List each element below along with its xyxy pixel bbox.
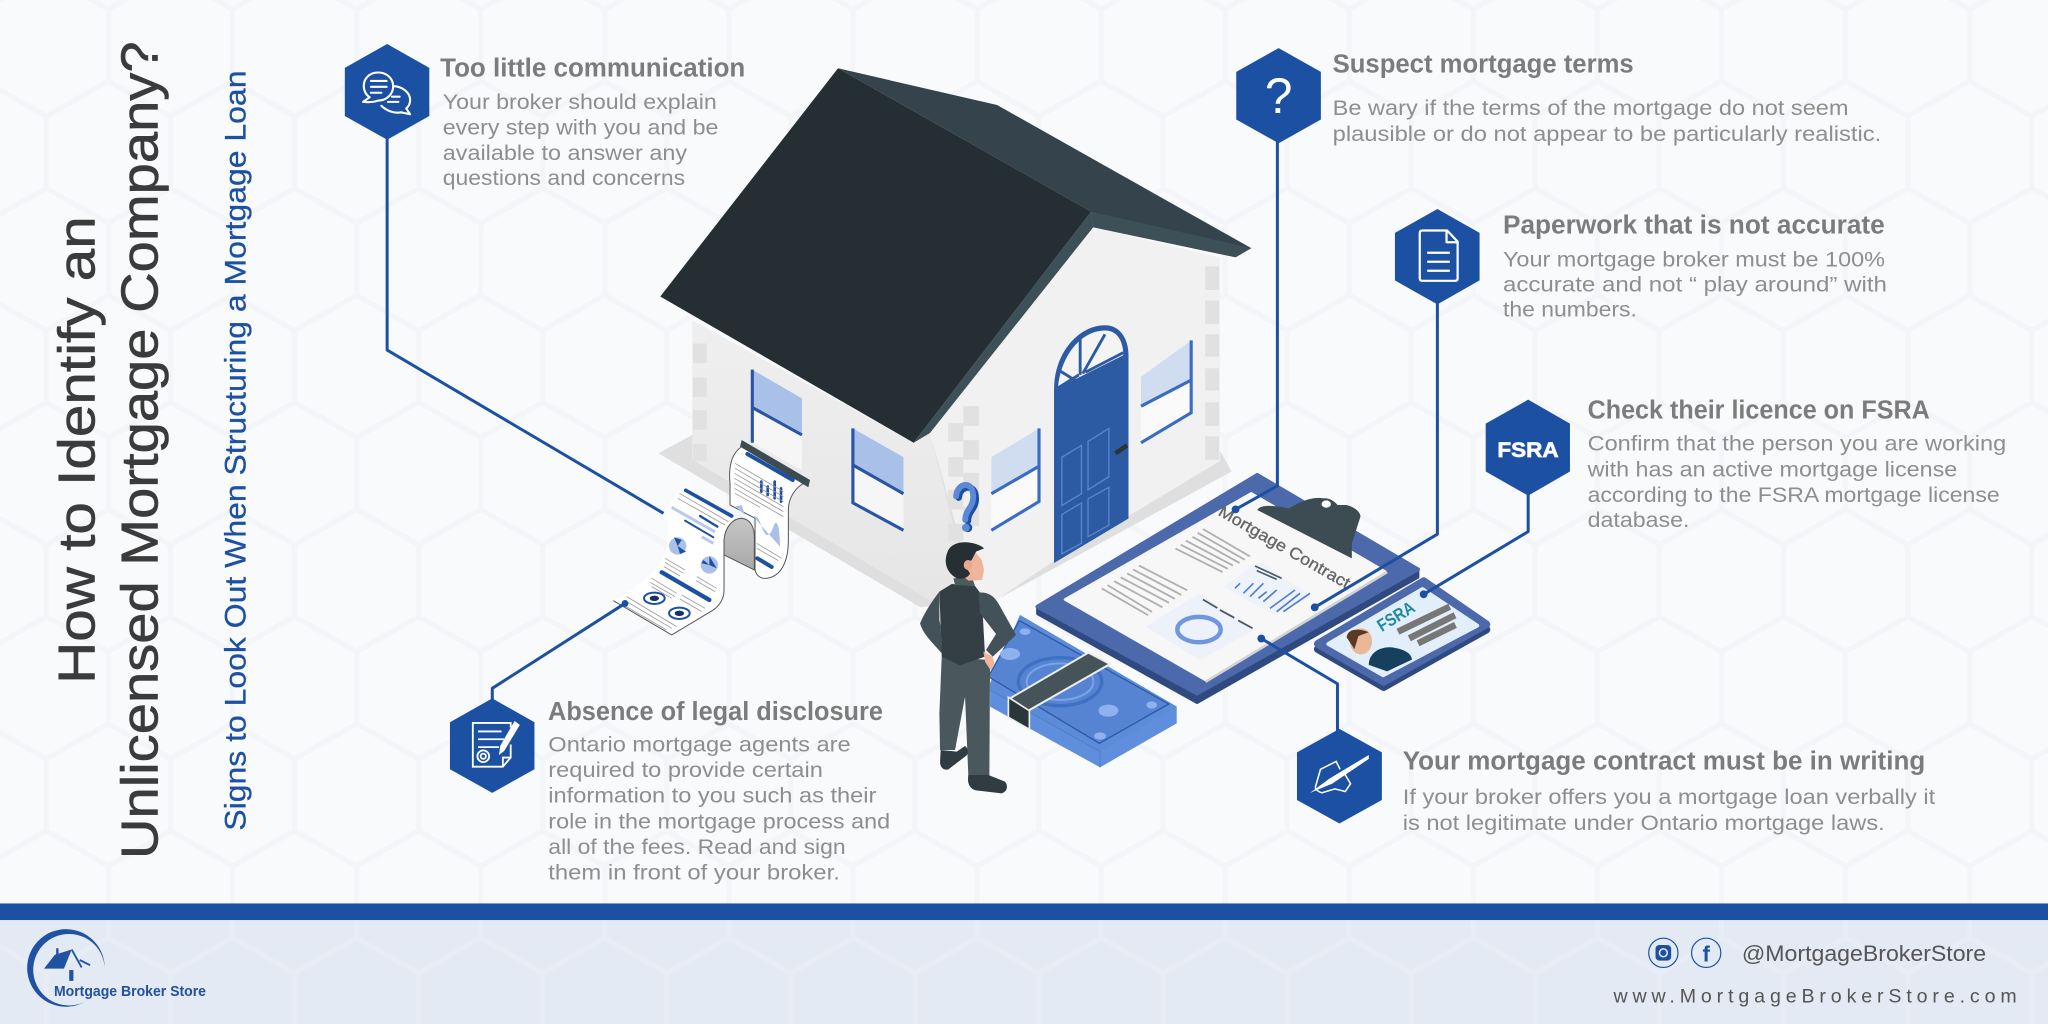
- roof: [660, 68, 1251, 443]
- main title: Unlicensed Mortgage Company?: [111, 41, 169, 859]
- body text: [1587, 431, 2006, 532]
- body text: questions and concerns: [443, 165, 685, 190]
- icon: question mark: [1236, 48, 1321, 143]
- body text: Confirm that the person you are working: [1588, 431, 2006, 456]
- website: www.MortgageBrokerStore.com: [1612, 985, 2017, 1007]
- body text: according to the FSRA mortgage license: [1588, 482, 2000, 507]
- connector endpoint dots: [622, 505, 1428, 642]
- footer: [0, 903, 2048, 1024]
- money strap: [1008, 653, 1110, 729]
- body text: all of the fees. Read and sign: [548, 834, 846, 859]
- body text: [1403, 784, 1935, 835]
- connector lines: [387, 131, 1528, 731]
- body text: Your mortgage broker must be 100%: [1503, 247, 1885, 272]
- callout: Check their licence on FSRA: [1486, 396, 2006, 532]
- icon: FSRA badge: FSRA: [1497, 437, 1559, 462]
- body text: is not legitimate under Ontario mortgage laws.: [1403, 810, 1885, 835]
- callout: Your mortgage contract must be in writing: [1297, 729, 1935, 835]
- door: [1054, 325, 1128, 563]
- main title: How to Identify an: [48, 216, 106, 684]
- callout: Absence of legal disclosure: [450, 698, 890, 884]
- window: right wall far: [1141, 340, 1191, 443]
- icon: FSRA badge: [1486, 400, 1570, 496]
- body text: required to provide certain: [548, 757, 823, 782]
- callout: Paperwork that is not accurate: [1395, 209, 1887, 322]
- illustration: mortgage contract clipboard: [1037, 475, 1418, 703]
- body text: If your broker offers you a mortgage loan verbally it: [1403, 784, 1935, 809]
- icon: facebook: [1692, 938, 1721, 967]
- callout: Too little communication: [345, 44, 745, 190]
- chart on contract: [1223, 562, 1312, 615]
- body text: [443, 89, 718, 190]
- body text: information to you such as their: [548, 783, 876, 808]
- body text: available to answer any: [443, 140, 687, 165]
- heading: Absence of legal disclosure: [548, 698, 883, 726]
- subtitle: Signs to Look Out When Structuring a Mortgage Loan: [220, 71, 253, 831]
- illustration: FSRA licence card: [1318, 581, 1486, 687]
- body text: plausible or do not appear to be particularly realistic.: [1333, 121, 1881, 146]
- illustration: FSRA licence card: FSRA: [1373, 597, 1419, 636]
- body text: [548, 732, 890, 884]
- icon: instagram: [1649, 938, 1678, 967]
- body text: [1503, 247, 1887, 322]
- body text: Ontario mortgage agents are: [548, 732, 851, 757]
- logo: Mortgage Broker Store: [27, 929, 206, 1007]
- body text: Be wary if the terms of the mortgage do not seem: [1333, 95, 1849, 120]
- illustration: man looking at house: [920, 542, 1016, 793]
- body text: role in the mortgage process and: [548, 808, 890, 833]
- window: left wall near: [853, 428, 903, 530]
- illustration: stack of money: [988, 615, 1177, 767]
- body text: the numbers.: [1503, 297, 1637, 322]
- illustration: question mark: [956, 485, 976, 532]
- clipboard clip: [1257, 498, 1360, 558]
- body text: accurate and not “ play around” with: [1503, 272, 1887, 297]
- icon: signed document: [450, 698, 534, 793]
- callout: Suspect mortgage terms: [1236, 48, 1881, 146]
- body text: Your broker should explain: [443, 89, 717, 114]
- window: right wall near: [991, 428, 1039, 530]
- illustration: house: [658, 68, 1251, 630]
- icon: hand signing: [1297, 729, 1382, 824]
- body text: them in front of your broker.: [548, 859, 840, 884]
- body text: [1333, 95, 1881, 146]
- donut panel: [1145, 593, 1254, 660]
- main title: [48, 41, 169, 859]
- heading: Too little communication: [440, 55, 745, 83]
- icon: document: [1395, 209, 1480, 304]
- icon: chat bubbles: [345, 44, 429, 140]
- window: left wall far: [752, 370, 802, 470]
- icon: question mark: ?: [1265, 68, 1292, 124]
- heading: Paperwork that is not accurate: [1503, 211, 1885, 239]
- body text: with has an active mortgage license: [1587, 457, 1957, 482]
- body text: every step with you and be: [443, 114, 718, 139]
- heading: Your mortgage contract must be in writing: [1403, 747, 1925, 775]
- heading: Suspect mortgage terms: [1333, 50, 1634, 78]
- text: Mortgage Contract: Mortgage Contract: [1215, 502, 1354, 593]
- body text: database.: [1588, 507, 1689, 532]
- social handle: @MortgageBrokerStore: [1742, 941, 1986, 966]
- icon: facebook: f: [1702, 941, 1710, 966]
- heading: Check their licence on FSRA: [1588, 396, 1930, 424]
- illustration: paper scroll report: [613, 440, 810, 635]
- logo: Mortgage Broker Store: Mortgage Broker Store: [54, 984, 206, 1000]
